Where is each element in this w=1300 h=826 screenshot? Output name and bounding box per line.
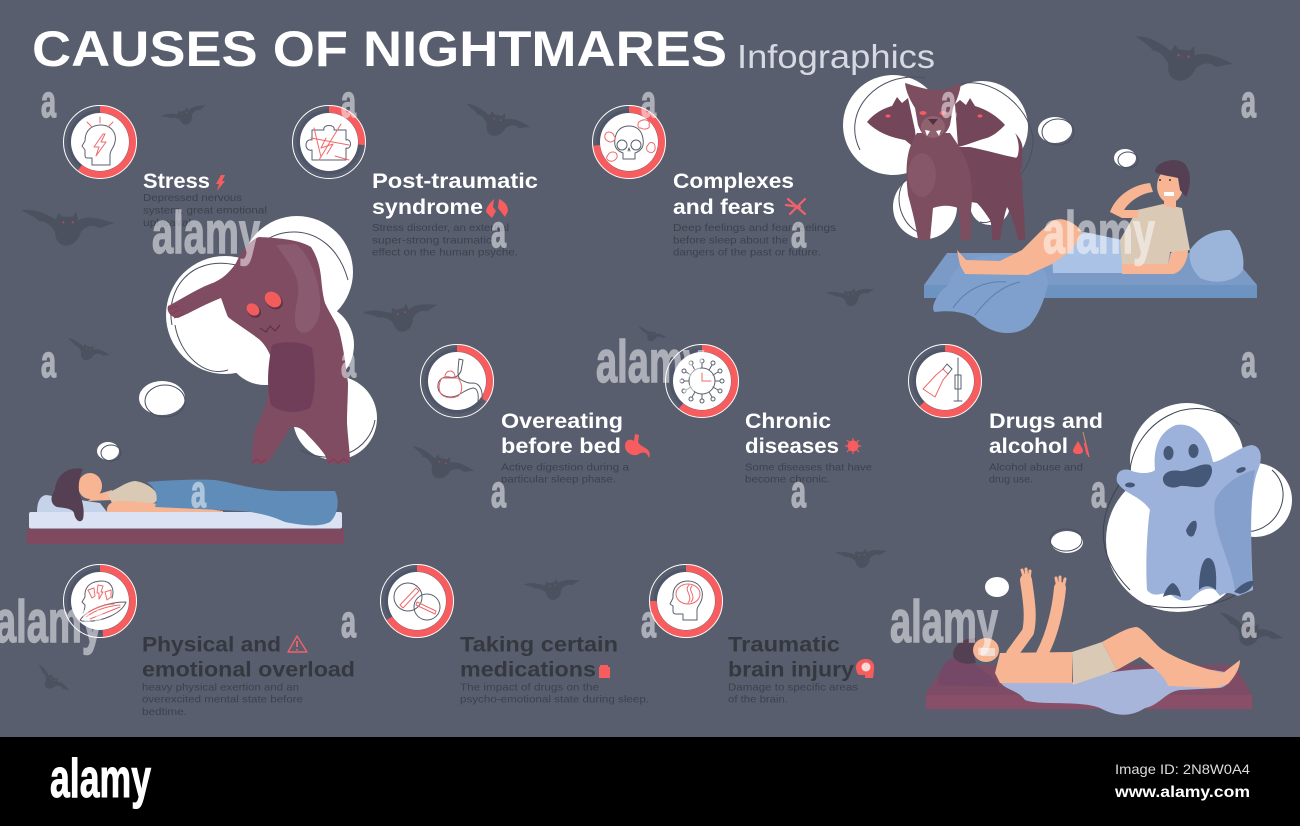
watermark: alamy (890, 589, 998, 655)
description: stress (143, 192, 267, 229)
description: physical: overexcited mental state before (142, 694, 303, 706)
description: medications: psycho-emotional state during sleep. (460, 694, 649, 706)
man in bed (924, 160, 1257, 333)
three-headed dog (867, 83, 1025, 240)
watermark: a (641, 596, 657, 647)
heading: overeating: Overeating (501, 409, 623, 433)
description: post-traumatic: Stress disorder, an external (372, 222, 509, 234)
icon: stomach (625, 434, 650, 458)
description: complexes (673, 222, 836, 259)
illustration: three-headed dog dream with man in bed (843, 75, 1257, 333)
panel: physical and emotional overload (64, 564, 355, 718)
panel: taking certain medications (380, 564, 649, 706)
description: medications (460, 682, 649, 706)
panel: drugs and alcohol (908, 344, 1103, 486)
panel: overeating before bed (420, 344, 650, 486)
heading: drugs: alcohol (989, 434, 1068, 458)
watermark: alamy (596, 329, 704, 395)
heading: complexes (673, 169, 794, 219)
description: brain injury: of the brain. (728, 694, 788, 706)
footer bar: www.alamy.com (1114, 784, 1250, 801)
heading: chronic (745, 409, 839, 458)
watermark: a (341, 76, 357, 127)
watermark: a (791, 206, 807, 257)
illustration: monster dream with sleeping woman (27, 216, 377, 544)
thought bubbles (1038, 117, 1138, 168)
description: overeating: particular sleep phase. (501, 474, 616, 486)
heading: physical: Physical and (142, 633, 281, 657)
progress ring: overeating (420, 344, 494, 418)
panel: post-traumatic syndrome (292, 106, 538, 259)
description: chronic: Some diseases that have (745, 462, 872, 474)
title: Infographics (737, 38, 935, 75)
watermark: alamy (0, 589, 103, 655)
description: stress: upheaval (143, 217, 191, 229)
description: brain injury (728, 682, 858, 706)
heading: post-traumatic: Post-traumatic (372, 169, 538, 193)
panel: complexes and fears (592, 106, 836, 259)
icon: lightning bolt (216, 175, 225, 191)
watermark: a (491, 206, 507, 257)
panel: stress (64, 106, 267, 229)
watermark: alamy (152, 200, 260, 266)
heading: brain injury: brain injury (728, 658, 854, 682)
description: overeating: Active digestion during a (501, 462, 629, 474)
description: complexes: Deep feelings and fear feelings (673, 222, 836, 234)
thought bubbles (97, 381, 185, 461)
watermark: a (491, 466, 507, 517)
heading: complexes: Complexes (673, 169, 794, 193)
heading: chronic: Chronic (745, 409, 831, 433)
heading: post-traumatic: syndrome (372, 195, 483, 219)
monster (168, 237, 350, 463)
heading: physical (142, 633, 355, 682)
icon: virus (845, 438, 861, 454)
footer bar (0, 737, 1300, 826)
heading: physical: emotional overload (142, 658, 355, 682)
description: complexes: before sleep about the (673, 234, 788, 246)
description: stress: Depressed nervous (143, 192, 242, 204)
description: physical: heavy physical exertion and an (142, 682, 299, 694)
description: chronic: become chronic. (745, 474, 830, 486)
description: complexes: dangers of the past or future. (673, 247, 821, 259)
watermark: a (641, 76, 657, 127)
description: stress: system, great emotional (143, 204, 267, 216)
description: post-traumatic (372, 222, 518, 259)
watermark: alamy (1043, 200, 1155, 266)
heading: overeating (501, 409, 623, 458)
panel: chronic diseases (666, 344, 872, 486)
progress ring: stress (64, 106, 136, 178)
description: physical: bedtime. (142, 706, 187, 718)
progress ring: brain injury (650, 564, 722, 638)
heading: chronic: diseases (745, 434, 839, 458)
description: drugs: drug use. (989, 474, 1033, 486)
watermark: a (41, 336, 57, 387)
icon: pill bottle (599, 665, 610, 678)
icon: crossbones (786, 199, 805, 214)
watermark: a (1241, 596, 1257, 647)
progress ring: physical (64, 564, 136, 638)
man in bed (925, 569, 1252, 715)
thought bubbles (985, 529, 1083, 597)
illustration: ghost dream with man in bed (925, 403, 1292, 715)
icon: warning (288, 636, 307, 652)
progress ring: complexes (592, 106, 666, 178)
watermark: a (191, 466, 207, 517)
progress ring: medications (380, 564, 454, 638)
heading: overeating: before bed (501, 434, 621, 458)
watermark: a (341, 336, 357, 387)
watermark: a (1091, 466, 1107, 517)
watermark: a (1241, 336, 1257, 387)
description: overeating (501, 462, 629, 486)
footer bar: Image ID: 2N8W0A4 (1115, 761, 1250, 777)
progress ring: drugs (908, 344, 982, 418)
heading: drugs (989, 409, 1103, 458)
footer bar: alamy (50, 747, 151, 809)
heading: complexes: and fears (673, 195, 775, 219)
ghost (1117, 425, 1261, 601)
heading: stress: Stress (143, 169, 210, 193)
watermark (0, 76, 1257, 655)
description: medications: The impact of drugs on the (460, 682, 599, 694)
description: post-traumatic: super-strong traumatic (372, 234, 492, 246)
description: physical (142, 682, 303, 718)
watermark: a (341, 596, 357, 647)
description: drugs (989, 462, 1083, 486)
heading: medications: Taking certain (460, 633, 618, 657)
description: drugs: Alcohol abuse and (989, 462, 1083, 474)
heading: brain injury: Traumatic (728, 633, 840, 657)
description: post-traumatic: effect on the human psyche. (372, 247, 518, 259)
progress ring: chronic (666, 344, 738, 418)
title: CAUSES OF NIGHTMARES (32, 21, 727, 77)
description: chronic (745, 462, 872, 486)
watermark: a (791, 466, 807, 517)
heading: medications (460, 633, 618, 682)
watermark: a (1241, 76, 1257, 127)
icon: broken heart (486, 199, 508, 218)
description: brain injury: Damage to specific areas (728, 682, 858, 694)
woman in bed (27, 468, 344, 544)
panel: traumatic brain injury (650, 564, 874, 706)
heading: brain injury (728, 633, 854, 682)
heading: post-traumatic (372, 169, 538, 219)
icon: drop and syringe (1073, 432, 1089, 457)
icon: head (856, 659, 874, 678)
watermark: a (941, 76, 957, 127)
bats (21, 36, 1286, 699)
heading: drugs: Drugs and (989, 409, 1103, 433)
watermark: a (41, 76, 57, 127)
heading: medications: medications (460, 658, 596, 682)
progress ring: post-traumatic (292, 106, 366, 178)
